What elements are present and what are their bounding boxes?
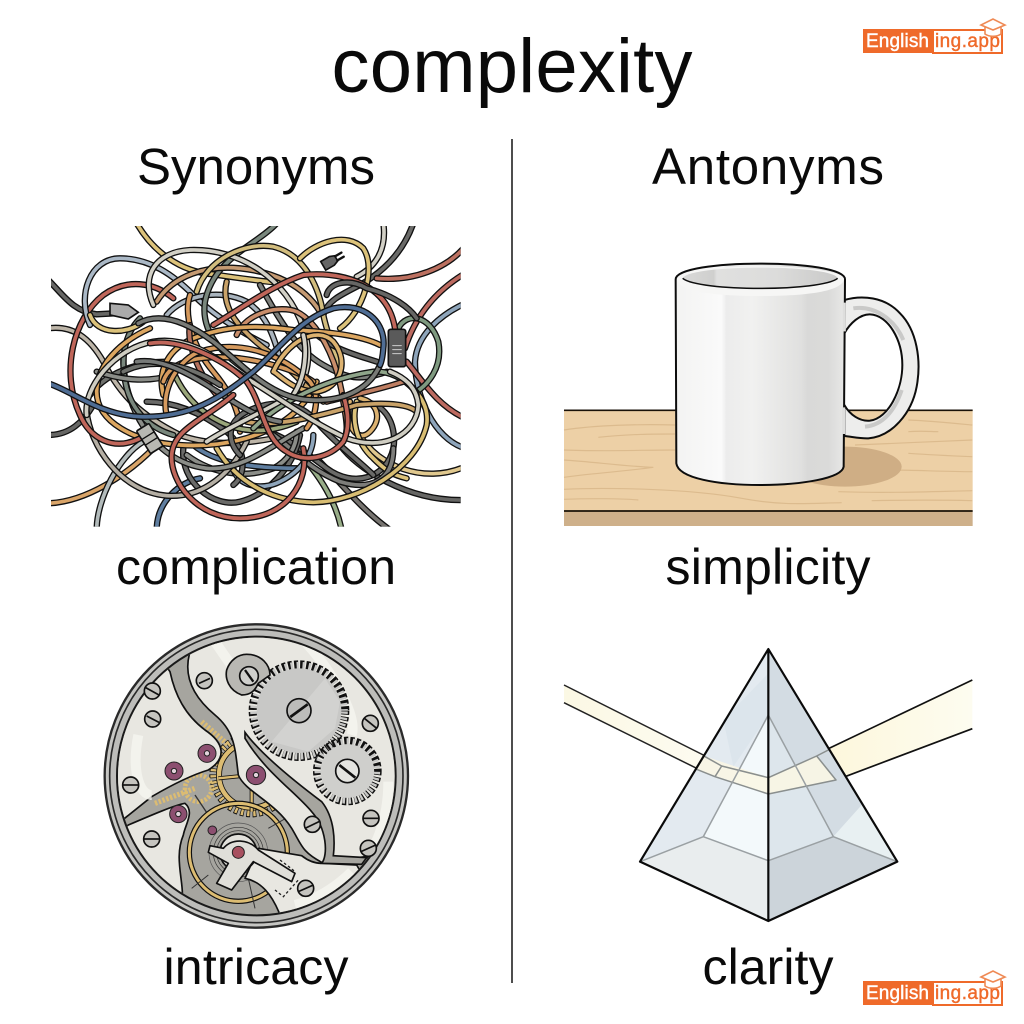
- incoming beam: [564, 685, 703, 768]
- illustration: watch movement: [104, 623, 410, 929]
- mug shadow: [788, 447, 902, 487]
- screws: [123, 673, 379, 896]
- illustration: tangled cables: [48, 223, 465, 530]
- mug body: [676, 264, 845, 485]
- logo: bottom right: ing.app: [935, 983, 1000, 1004]
- icon: connector bottom: [136, 423, 163, 454]
- hairspring centre: [220, 834, 257, 871]
- large gear: [253, 665, 345, 756]
- label: intricacy: intricacy: [164, 939, 348, 995]
- gear train strip: [245, 732, 367, 864]
- regulator scale: [275, 860, 298, 897]
- mug rim: [677, 266, 844, 296]
- logo: bottom right: [863, 971, 1005, 1005]
- click wheel: [226, 654, 270, 695]
- divider: [511, 139, 513, 983]
- balance wheel: [189, 803, 292, 908]
- heading: synonyms: Synonyms: [137, 138, 375, 195]
- logo: bottom right: English: [866, 983, 929, 1004]
- prism outline: [640, 649, 897, 921]
- label: complication: complication: [116, 539, 396, 595]
- outgoing beam: [829, 680, 972, 777]
- label: clarity: clarity: [702, 939, 834, 995]
- icon: inline switch: [388, 329, 406, 367]
- prism inner edges: [640, 715, 897, 862]
- logo: top right: [863, 19, 1005, 53]
- regulator arm: [208, 841, 295, 890]
- illustration: glass prism with light beam: [564, 649, 972, 921]
- refracted beam: [697, 750, 836, 794]
- movement: [118, 638, 395, 912]
- watch case: [105, 624, 408, 928]
- logo: top right: ing.app: [935, 31, 1000, 52]
- label: simplicity: simplicity: [666, 539, 870, 595]
- table top: [564, 410, 973, 526]
- prism faces: [640, 649, 897, 921]
- handle joins: [839, 303, 849, 434]
- gold wheels: [154, 720, 276, 818]
- logo: top right: English: [866, 31, 929, 52]
- jewels: [165, 744, 266, 858]
- bridge plates: [118, 638, 395, 912]
- heading: antonyms: Antonyms: [652, 138, 884, 195]
- mug handle: [844, 298, 919, 438]
- icon: plug left: [110, 303, 138, 319]
- title: complexity: [332, 24, 692, 109]
- icon: plug top: [321, 250, 345, 270]
- illustration: white mug on table: [564, 264, 973, 526]
- plate light bands: [136, 638, 388, 905]
- mug opening: [683, 268, 838, 288]
- small gear: [317, 741, 377, 801]
